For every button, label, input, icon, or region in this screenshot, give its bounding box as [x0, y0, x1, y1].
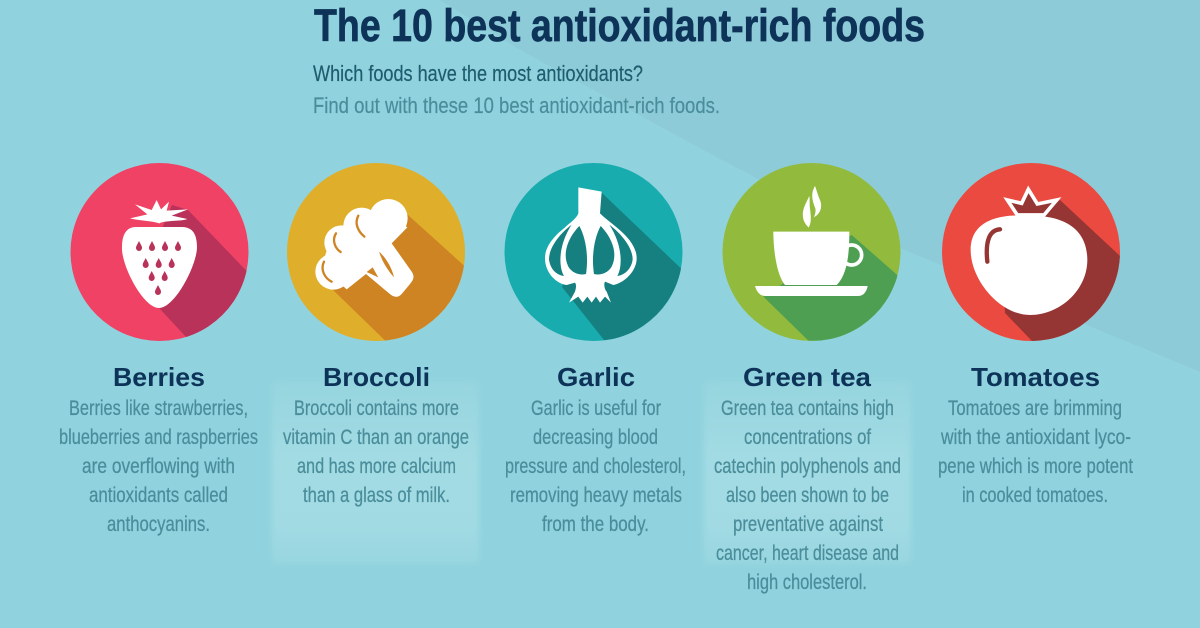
text: tomatoes: with the antioxidant lyco- [940, 426, 1131, 449]
text: tomatoes: in cooked tomatoes. [962, 484, 1108, 507]
text: garlic [505, 397, 686, 536]
text: berries: are overflowing with [82, 455, 235, 478]
text: garlic: from the body. [542, 513, 649, 536]
title: The 10 best antioxidant-rich foods [314, 0, 925, 51]
icon: broccoli [287, 163, 465, 341]
panel: tomatoes [938, 163, 1133, 507]
text: green tea: high cholesterol. [747, 571, 867, 594]
text: berries [59, 397, 258, 536]
text: garlic: Garlic is useful for [531, 397, 661, 420]
text: green tea: catechin polyphenols and [714, 455, 901, 478]
heading: tomatoes: Tomatoes [971, 362, 1100, 392]
text: tomatoes: pene which is more potent [938, 455, 1133, 478]
text: garlic: removing heavy metals [510, 484, 682, 507]
icon: tomato [942, 163, 1130, 350]
text: tomatoes [938, 397, 1133, 507]
text: broccoli: than a glass of milk. [303, 484, 450, 507]
text: broccoli: vitamin C than an orange [283, 426, 469, 449]
text: garlic: pressure and cholesterol, [505, 455, 686, 478]
text: green tea [714, 397, 901, 594]
heading: berries: Berries [113, 362, 205, 392]
icon: tea cup [722, 163, 900, 341]
heading: broccoli: Broccoli [323, 362, 430, 392]
text: green tea: preventative against [733, 513, 883, 536]
highlight box: green tea [704, 381, 911, 564]
highlight box: broccoli [272, 381, 479, 564]
text: green tea: also been shown to be [726, 484, 889, 507]
panel: garlic [504, 163, 690, 536]
text: broccoli: and has more calcium [297, 455, 456, 478]
text: green tea: cancer, heart disease and [716, 542, 899, 565]
text: tomatoes: Tomatoes are brimming [948, 397, 1122, 420]
panel: berries [59, 163, 262, 536]
subtitle question: Which foods have the most antioxidants? [313, 61, 643, 86]
text: berries: antioxidants called [89, 484, 228, 507]
icon: garlic [504, 163, 690, 350]
panel: green tea [704, 163, 911, 594]
text: garlic: decreasing blood [533, 426, 658, 449]
heading: garlic: Garlic [557, 362, 635, 392]
text: berries: Berries like strawberries, [69, 397, 248, 420]
heading: green tea: Green tea [743, 362, 872, 392]
text: berries: anthocyanins. [107, 513, 210, 536]
text: berries: blueberries and raspberries [59, 426, 258, 449]
text: broccoli [283, 397, 469, 507]
subtitle intro: Find out with these 10 best antioxidant-rich foods. [313, 93, 720, 118]
text: green tea: concentrations of [744, 426, 871, 449]
icon: strawberry [70, 163, 248, 341]
text: green tea: Green tea contains high [721, 397, 894, 420]
panel: broccoli [272, 163, 480, 564]
text: broccoli: Broccoli contains more [294, 397, 459, 420]
